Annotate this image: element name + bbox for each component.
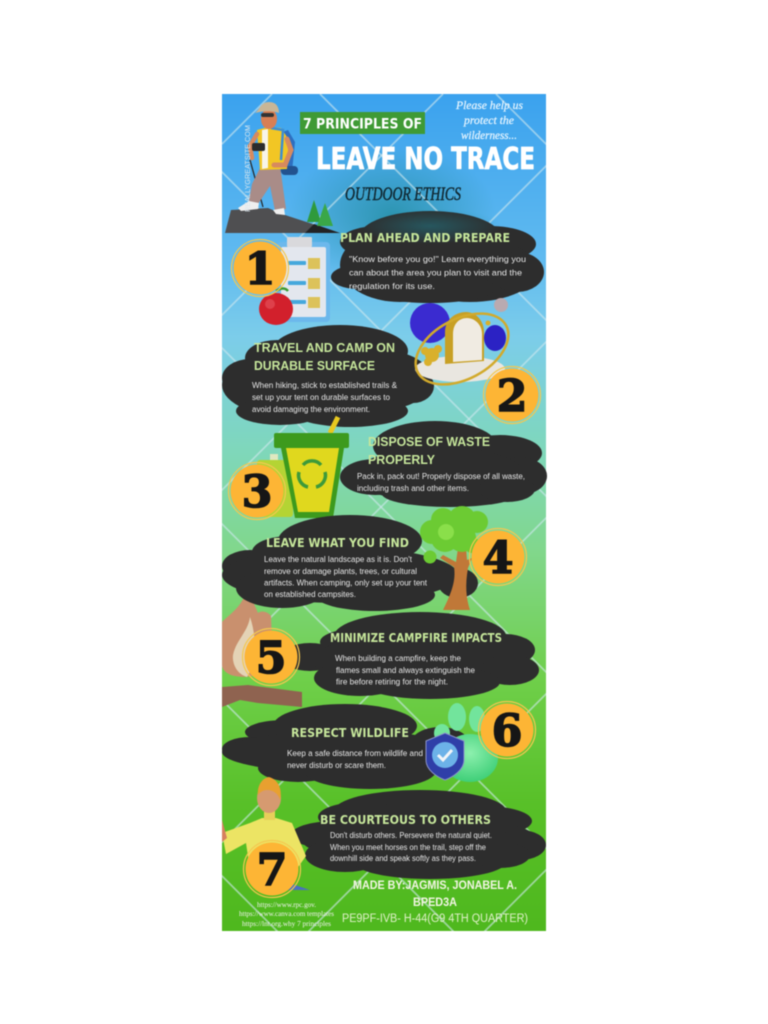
icon: campfire [222,585,302,707]
icon: recycling bin [257,417,349,518]
number badge 4: 4 [483,533,513,584]
body 5 [335,653,475,686]
panel: step 6 [222,704,470,789]
cloud 1 [331,211,544,303]
body 7: downhill side and speak softly as they pass. [330,853,476,863]
icon: arch sculpture [404,298,520,399]
heading 2: DURABLE SURFACE [254,359,375,373]
number badge 6: 6 [492,706,522,757]
heading 3 [368,435,490,467]
heading 3: PROPERLY [368,453,436,467]
credits: PE9PF-IVB- H-44(G9 4TH QUARTER) [342,913,528,925]
body 1: can about the area you plan to visit and the [349,268,522,278]
panel: step 1 [331,208,544,303]
body 2: set up your tent on durable surfaces to [252,392,390,402]
body 3: including trash and other items. [357,483,469,493]
hat [255,102,279,113]
body 6 [287,748,423,770]
torso [257,127,289,170]
body 2: When hiking, stick to established trails & [252,380,397,390]
rock [225,208,340,233]
credits [342,880,528,925]
number badge 7 [244,840,300,898]
tagline: wilderness... [461,130,517,142]
legs [249,166,286,211]
source links: https://lnt.org.why 7 principles [242,919,331,928]
panel: step 2 [222,325,434,427]
panel: step 5 [280,612,539,699]
watermark: REALLYGREATSITE.COM [243,125,252,212]
main title: LEAVE NO TRACE [316,142,535,177]
cloud 2 [222,325,434,427]
panel: step 3 [340,421,547,507]
title badge [300,112,425,134]
body 4: remove or damage plants, trees, or cultural [264,566,417,576]
number badge 5: 5 [256,633,286,684]
panel: step 7 [291,790,546,879]
body 7: When you meet horses on the trail, step off the [330,842,486,852]
shield [426,733,464,780]
body 3: Pack in, pack out! Properly dispose of all waste, [357,471,525,481]
number badge 1: 1 [245,244,275,295]
body 5: fire before retiring for the night. [336,676,448,686]
heading 7: BE COURTEOUS TO OTHERS [320,812,491,827]
icon: tree [420,506,488,610]
body 7: Don't disturb others. Persevere the natural quiet. [330,830,492,840]
backpack [276,130,298,175]
body 4: artifacts. When camping, only set up your tent [264,578,428,588]
shoes [238,201,285,215]
body 1: regulation for its use. [349,281,435,291]
panel: step 4 [222,515,478,611]
title badge: 7 PRINCIPLES OF [303,116,422,132]
number badge 7: 7 [257,845,287,896]
body 4: on established campsites. [264,589,356,599]
body 1: "Know before you go!" Learn everything you [349,254,526,264]
background panel [221,93,547,932]
number badge 4 [470,528,526,586]
body 2: avoid damaging the environment. [252,404,370,414]
credits: BPED3A [413,897,457,909]
apple [259,288,293,325]
body 7 [330,830,492,863]
number badge 3 [228,462,286,520]
icon: hiker on rock [225,102,340,233]
tagline [455,100,524,142]
body 6: Keep a safe distance from wildlife and [287,748,423,758]
source links: https://www.rpc.gov. [257,900,316,909]
arms [274,139,291,165]
head [261,109,277,129]
recycle symbol [299,461,325,487]
cloud 6 [222,704,470,789]
heading 5: MINIMIZE CAMPFIRE IMPACTS [330,630,502,645]
cloud 7 [291,790,546,879]
camera [252,143,265,151]
body 5: When building a campfire, keep the [335,653,461,663]
heading 6: RESPECT WILDLIFE [291,725,409,740]
body 1 [349,254,526,291]
body 3 [357,471,525,493]
heading 2: TRAVEL AND CAMP ON [254,341,395,355]
cloud 3 [340,421,547,507]
number badge 2 [484,366,540,424]
body 4: Leave the natural landscape as it is. Don't [264,554,413,564]
number badge 6 [478,702,536,758]
icon: person [222,777,310,890]
number badge 1 [232,240,288,296]
number badge 2: 2 [497,371,527,422]
pine trees [307,200,333,226]
body 6: never disturb or scare them. [287,760,386,770]
icon: paw and shield [426,703,498,782]
number badge 5 [242,628,300,686]
cloud 5 [280,612,539,699]
credits: MADE BY:JAGMIS, JONABEL A. [353,880,517,892]
tagline: Please help us [455,100,524,112]
trekking pole [250,160,263,207]
heading 1: PLAN AHEAD AND PREPARE [340,230,510,245]
cloud 4 [222,515,478,611]
tagline: protect the [463,115,514,127]
heading 2 [254,341,395,373]
number badge 3: 3 [242,467,272,518]
icon: clipboard and apple [259,237,330,325]
heading 3: DISPOSE OF WASTE [368,435,490,449]
body 4 [264,554,428,599]
heading 4: LEAVE WHAT YOU FIND [266,535,409,550]
source links: https://www.canva.com templates [239,909,334,918]
source links [239,900,334,928]
body 5: flames small and always extinguish the [336,665,475,675]
subtitle: OUTDOOR ETHICS [345,184,461,205]
body 2 [252,380,397,414]
